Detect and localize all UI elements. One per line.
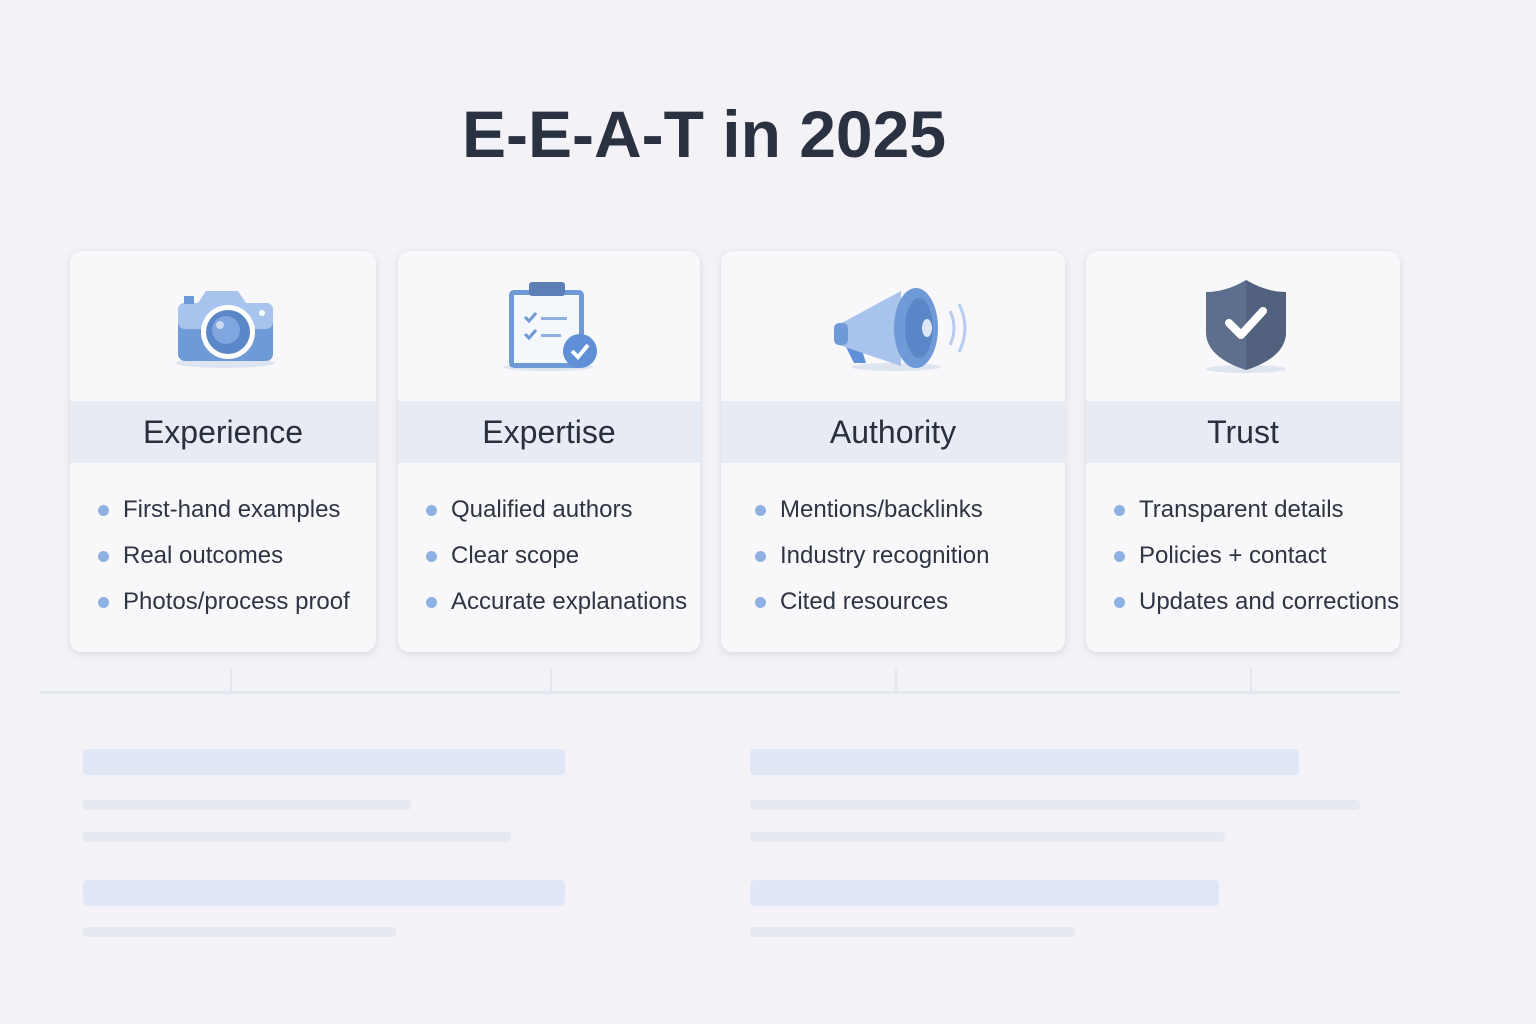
list: trust (1114, 496, 1399, 615)
heading: Trust (1086, 401, 1400, 463)
list: trust: Updates and corrections (1139, 588, 1399, 615)
skeleton text: right column (750, 749, 1360, 937)
heading: Authority: Authority (830, 414, 956, 450)
list: experience: Real outcomes (123, 542, 283, 569)
heading: Experience: Experience (143, 414, 303, 450)
list: expertise: Accurate explanations (451, 588, 687, 615)
icon: shield (1206, 280, 1286, 373)
panel: expertise (398, 251, 700, 652)
heading: Expertise: Expertise (482, 414, 616, 450)
panel: trust (1086, 251, 1400, 652)
heading: Experience (70, 401, 376, 463)
list: authority (755, 496, 989, 615)
list: experience: First-hand examples (123, 496, 340, 523)
heading: Authority (721, 401, 1065, 463)
list: expertise: Clear scope (451, 542, 579, 569)
list: trust: Transparent details (1139, 496, 1344, 523)
timeline connector (40, 668, 1400, 694)
heading: Expertise (398, 401, 700, 463)
list: trust: Policies + contact (1139, 542, 1326, 569)
icon: camera (175, 291, 275, 368)
icon: clipboard (503, 282, 597, 371)
list: expertise (426, 496, 687, 615)
list: experience: Photos/process proof (123, 588, 350, 615)
list: authority: Cited resources (780, 588, 948, 615)
list: authority: Industry recognition (780, 542, 989, 569)
list: experience (98, 496, 350, 615)
panel: experience (70, 251, 376, 652)
list: expertise: Qualified authors (451, 496, 632, 523)
panel: authority (721, 251, 1065, 652)
heading: Trust: Trust (1207, 414, 1279, 450)
list: authority: Mentions/backlinks (780, 496, 983, 523)
icon: megaphone (834, 288, 966, 371)
skeleton text: left column (83, 749, 565, 937)
title: E-E-A-T in 2025 (462, 97, 946, 171)
